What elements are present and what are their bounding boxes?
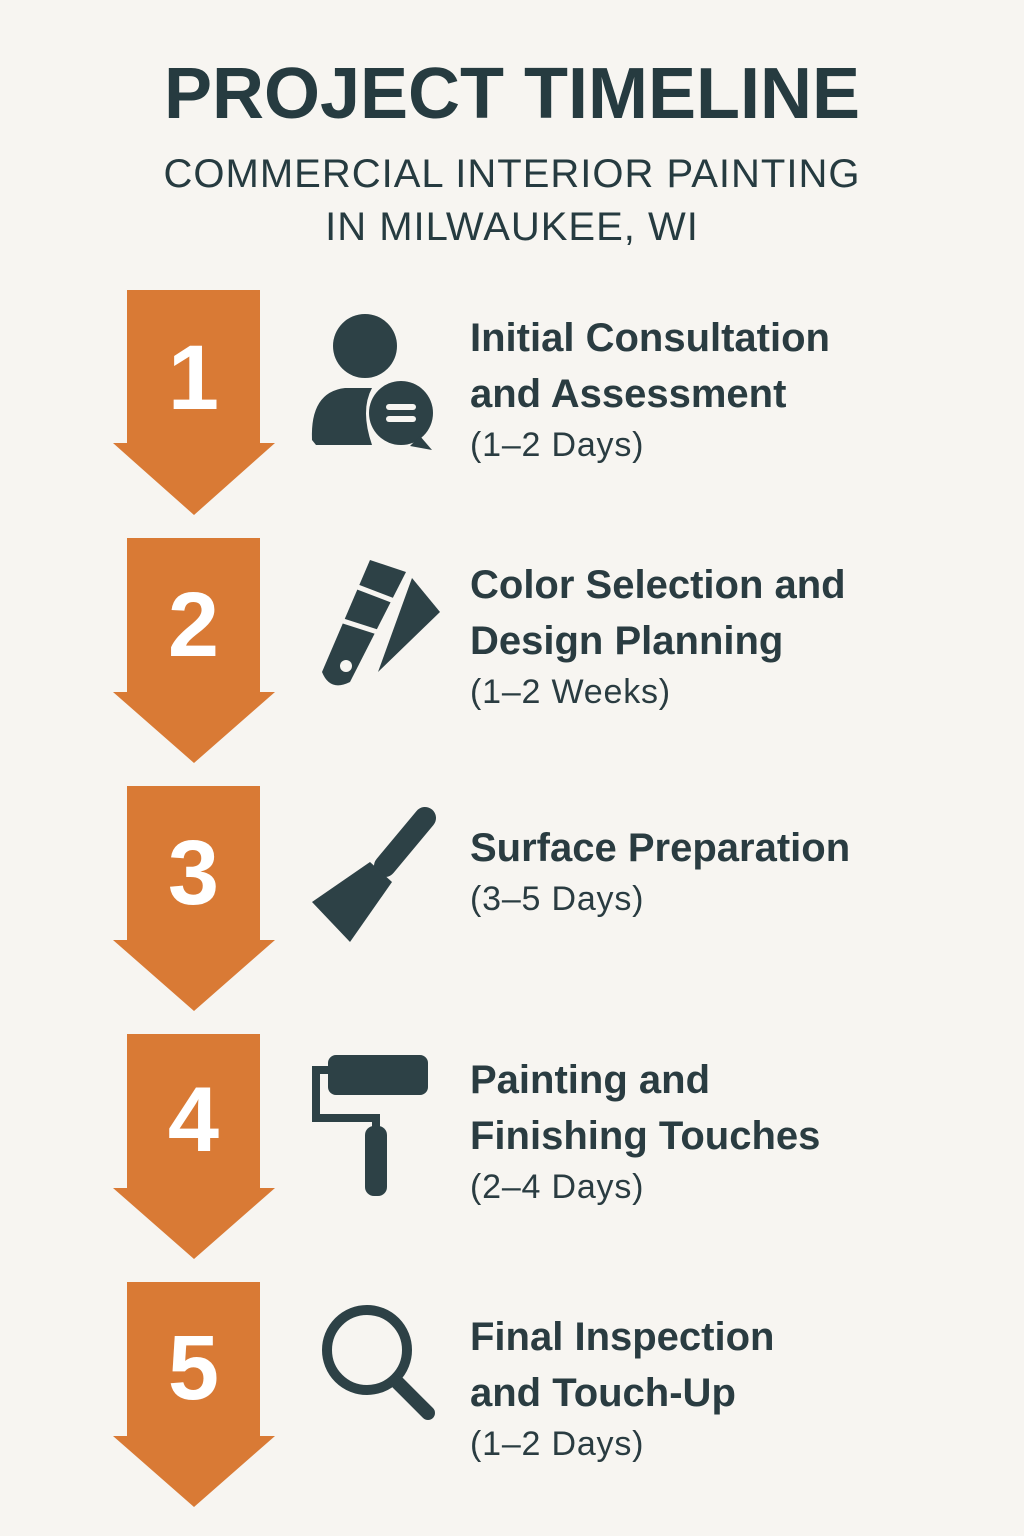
icon: scraper: [312, 818, 425, 942]
icon: person with chat: [312, 314, 433, 450]
step 5 text: (1–2 Days): [470, 1425, 644, 1463]
step 4 text: (2–4 Days): [470, 1168, 644, 1206]
step 3 text: [470, 826, 850, 918]
step 3 text: (3–5 Days): [470, 880, 644, 918]
step 2 text: Design Planning: [470, 619, 783, 663]
icon: color swatches: [322, 560, 440, 685]
step 5 text: [470, 1315, 774, 1463]
step 4 text: Finishing Touches: [470, 1114, 820, 1158]
step 4 text: Painting and: [470, 1058, 710, 1102]
step 2 text: (1–2 Weeks): [470, 673, 671, 711]
number 5: 5: [168, 1317, 219, 1419]
number 2: 2: [168, 574, 219, 676]
step 1 text: Initial Consultation: [470, 316, 830, 360]
step 1 text: [470, 316, 830, 464]
subtitle: [164, 152, 860, 249]
step 5 text: Final Inspection: [470, 1315, 774, 1359]
step 2 text: Color Selection and: [470, 563, 846, 607]
icon: magnifier: [327, 1310, 428, 1413]
number 4: 4: [168, 1069, 219, 1171]
number 1: 1: [168, 327, 219, 429]
title: PROJECT TIMELINE: [164, 54, 860, 134]
step 3 text: Surface Preparation: [470, 826, 850, 870]
step 2 text: [470, 563, 846, 711]
icon: roller: [316, 1055, 428, 1196]
step 1 text: (1–2 Days): [470, 426, 644, 464]
number 3: 3: [168, 822, 219, 924]
step 4 text: [470, 1058, 820, 1206]
subtitle: IN MILWAUKEE, WI: [325, 205, 699, 249]
subtitle: COMMERCIAL INTERIOR PAINTING: [164, 152, 860, 196]
step 1 text: and Assessment: [470, 372, 786, 416]
step 5 text: and Touch-Up: [470, 1371, 736, 1415]
